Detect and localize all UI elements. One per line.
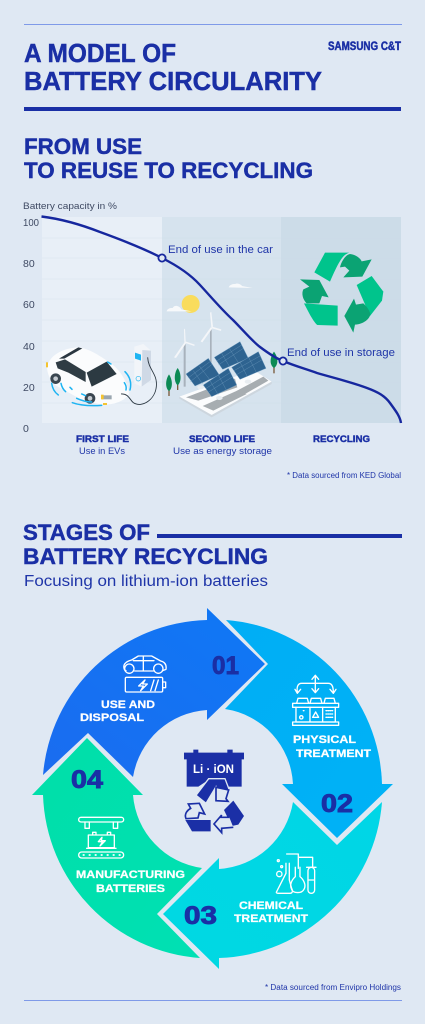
clouds <box>167 306 192 311</box>
heading: from use to reuse to recycling: FROM USE <box>24 134 142 159</box>
solar panels <box>186 342 266 397</box>
illustration: electric car and charger <box>46 344 156 406</box>
label: USE AND <box>101 699 155 711</box>
logo: Samsung C&T: SAMSUNG C&T <box>328 41 401 53</box>
stage 04 arrow: manufacturing batteries: BATTERIES <box>96 883 165 895</box>
heading: stages of battery recycling: BATTERY RECYCLING <box>23 544 268 569</box>
heading: from use to reuse to recycling <box>24 134 313 183</box>
chart: battery capacity over life stages <box>23 201 401 480</box>
illustration: wind turbines and solar panels <box>166 284 277 417</box>
label: CHEMICAL <box>239 900 303 912</box>
label: PHYSICAL <box>293 734 356 746</box>
y axis labels: 80 <box>23 258 35 270</box>
heading: stages of battery recycling: STAGES OF <box>23 520 150 545</box>
label: first life: Use in EVs <box>79 446 125 457</box>
panel: second life <box>162 217 281 423</box>
heading: stages of battery recycling <box>23 520 402 590</box>
number 04: 04 <box>71 766 103 794</box>
callout: end of use in the car: End of use in the car <box>168 244 273 256</box>
callout: end of use in storage: End of use in storage <box>287 347 395 359</box>
marker: end of use in the car <box>158 254 166 262</box>
icon: sorting bins <box>293 675 339 725</box>
icon: green recycling symbol <box>300 253 383 333</box>
label: second life: SECOND LIFE <box>189 434 255 445</box>
y axis labels: 60 <box>23 299 35 311</box>
y axis labels: 20 <box>23 382 35 394</box>
sun <box>182 295 200 313</box>
y axis labels: 0 <box>23 423 29 435</box>
icon: battery on assembly line <box>79 817 124 858</box>
cycle diagram: four recycling stages <box>32 608 393 969</box>
panel: recycling <box>281 217 401 423</box>
trees <box>168 367 275 396</box>
y axis labels <box>23 217 39 435</box>
label: first life <box>76 434 129 457</box>
y axis labels: 100 <box>23 217 39 229</box>
label: first life: FIRST LIFE <box>76 434 129 445</box>
platform <box>179 370 272 415</box>
stage 01 arrow: use and disposal: DISPOSAL <box>80 712 144 724</box>
title <box>24 40 322 96</box>
stage 03 arrow: chemical treatment <box>163 802 382 969</box>
axis title: Battery capacity in % <box>23 201 118 212</box>
stage 04 arrow: manufacturing batteries <box>32 738 202 958</box>
number 02: 02 <box>321 790 353 818</box>
label: recycling: RECYCLING <box>313 434 370 445</box>
y axis labels: 40 <box>23 341 35 353</box>
stage 02 arrow: physical treatment <box>225 620 393 838</box>
stage 01 arrow: use and disposal <box>43 608 265 777</box>
number 03: 03 <box>184 902 217 930</box>
text: Li-iON: Li · iON <box>193 764 234 776</box>
heading: from use to reuse to recycling: TO REUSE TO RECYCLING <box>24 158 313 183</box>
number 01: 01 <box>212 652 239 680</box>
label: MANUFACTURING <box>76 869 185 881</box>
icon: flasks <box>276 854 316 893</box>
title: BATTERY CIRCULARITY <box>24 68 322 96</box>
stage 02 arrow: physical treatment: TREATMENT <box>296 748 371 760</box>
heading: stages of battery recycling: Focusing on lithium-ion batteries <box>24 573 268 590</box>
curve: capacity decline <box>42 216 401 423</box>
label: second life: Use as energy storage <box>173 446 272 457</box>
turbines <box>174 312 221 387</box>
center icon: Li-ion battery with recycling symbol <box>184 750 244 833</box>
title: A MODEL OF <box>24 40 176 68</box>
stage 03 arrow: chemical treatment: TREATMENT <box>234 913 308 925</box>
label: second life <box>173 434 272 457</box>
footnote: KED Global: * Data sourced from KED Global <box>287 471 401 480</box>
marker: end of use in storage <box>279 357 287 365</box>
panel: first life <box>42 217 162 423</box>
icon: car and battery <box>124 656 166 692</box>
footnote: Envipro Holdings: * Data sourced from Envipro Holdings <box>265 983 401 992</box>
